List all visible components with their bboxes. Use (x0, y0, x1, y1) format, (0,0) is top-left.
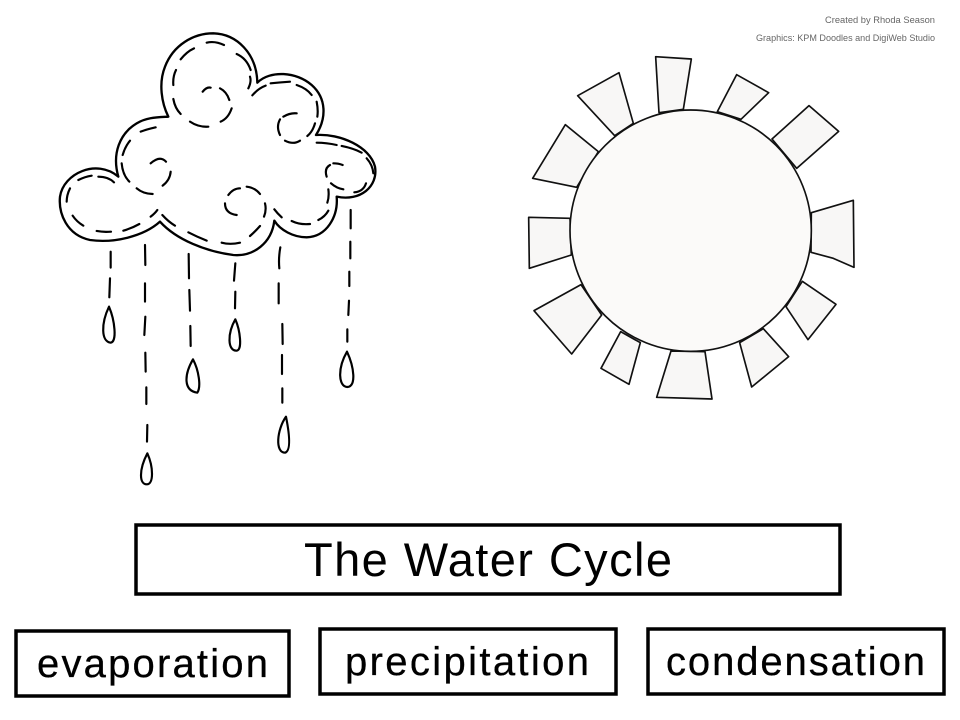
credits text (756, 15, 935, 43)
icon: rain drops (103, 210, 353, 484)
label: condensation (648, 629, 944, 694)
sun disc (570, 110, 811, 351)
title box (136, 525, 840, 594)
credits text: Created by Rhoda Season (825, 15, 935, 25)
drop 1 (103, 307, 115, 343)
label: evaporation: evaporation (37, 642, 268, 686)
drop 5 (278, 417, 289, 453)
label: condensation: condensation (666, 640, 925, 684)
icon: cloud (60, 33, 375, 255)
cloud stitching and swirls (67, 42, 373, 244)
drop 4 (229, 319, 240, 351)
drop 6 (340, 352, 353, 387)
drop 3 (186, 359, 199, 393)
sun rays (529, 57, 854, 399)
label: precipitation: precipitation (345, 640, 589, 684)
cloud outline (60, 33, 375, 255)
drop 2 (141, 453, 152, 484)
credits text: Graphics: KPM Doodles and DigiWeb Studio (756, 33, 935, 43)
label: evaporation (16, 631, 289, 696)
icon: sun (529, 57, 854, 399)
title text: The Water Cycle (304, 533, 672, 586)
label: precipitation (320, 629, 616, 694)
rain dashes (109, 210, 351, 442)
